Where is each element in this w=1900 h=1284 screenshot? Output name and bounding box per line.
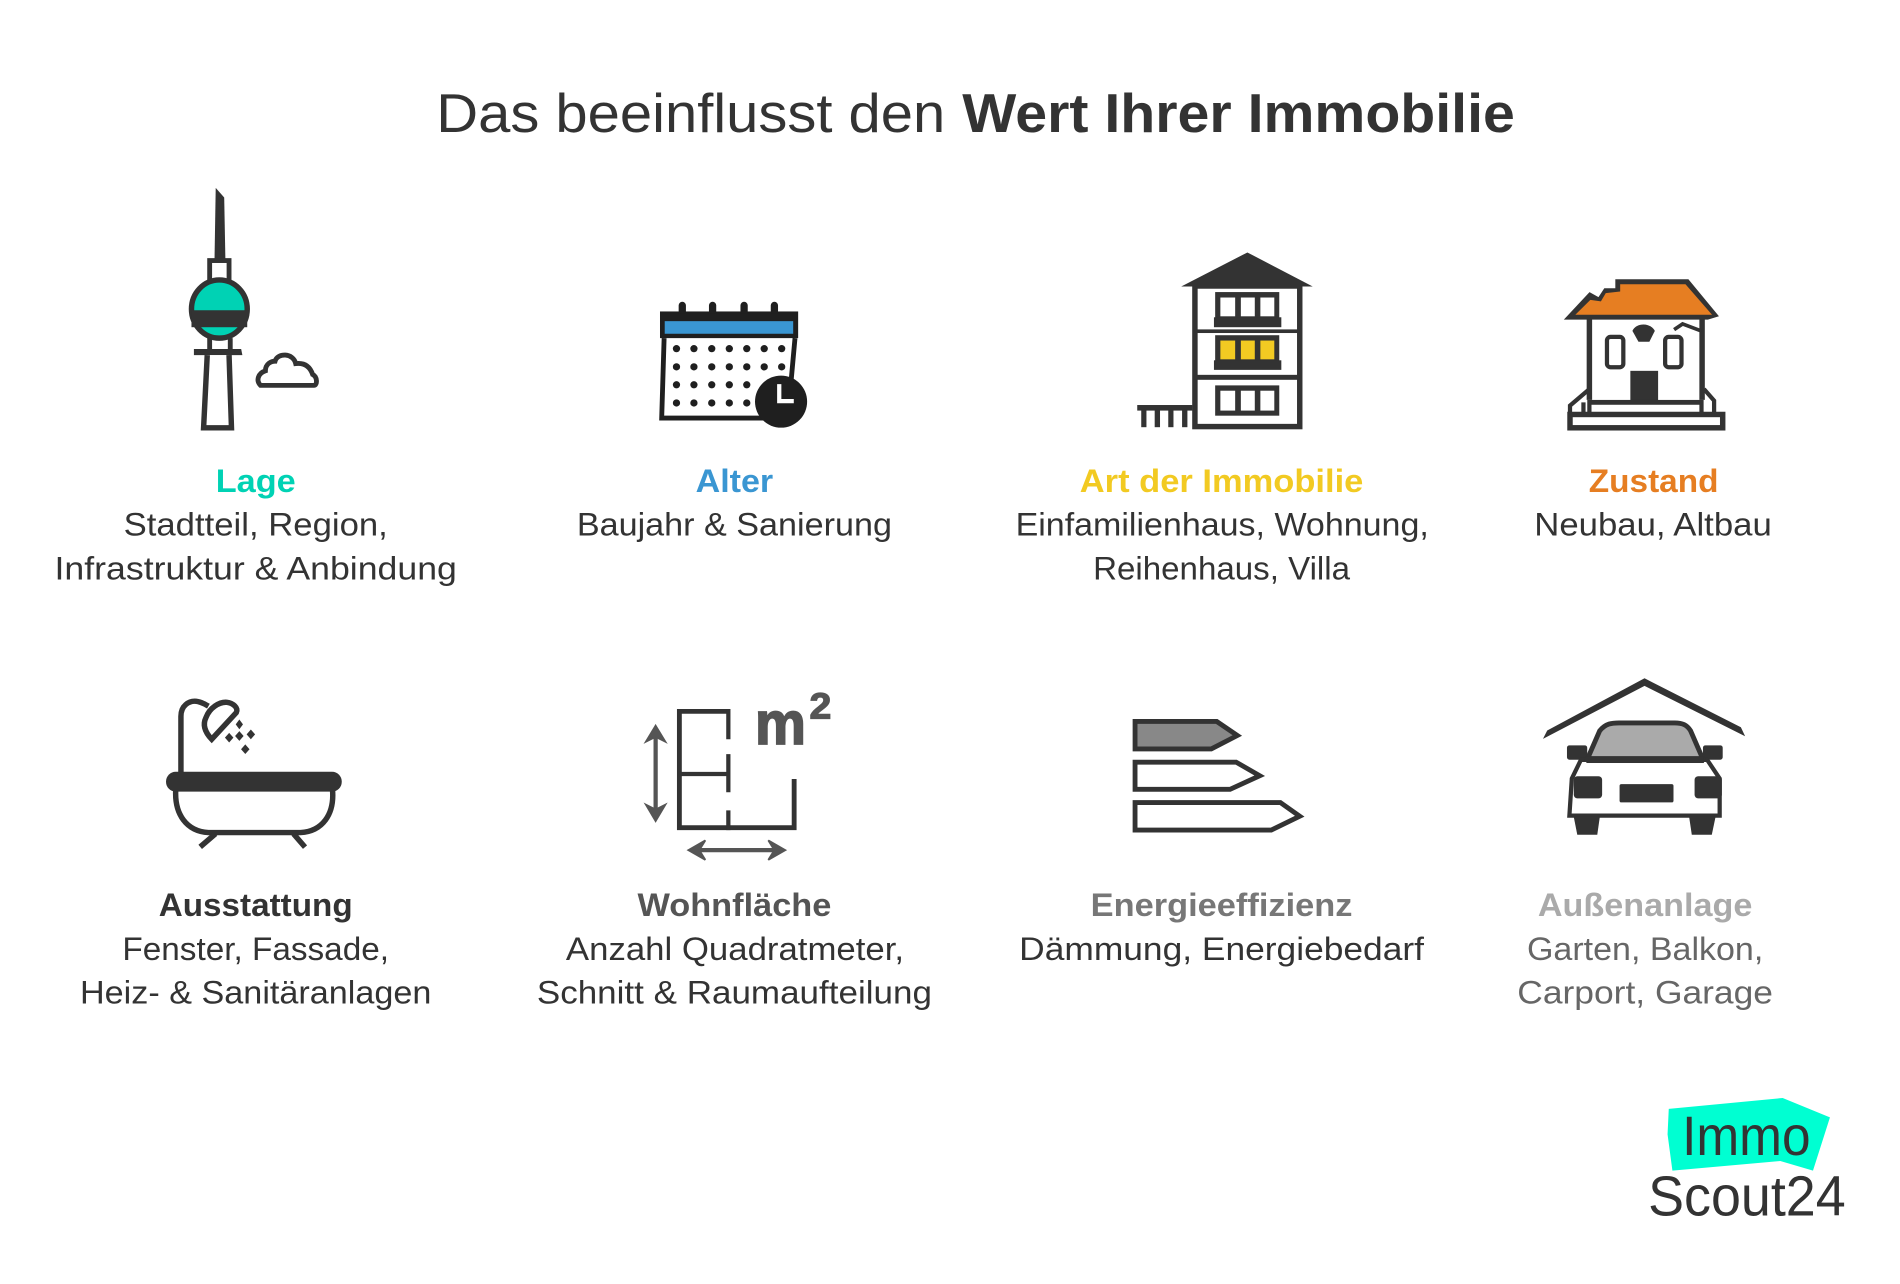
description: Ausstattung: Heiz- & Sanitäranlagen — [80, 973, 431, 1010]
description: Außenanlage: Carport, Garage — [1517, 973, 1773, 1010]
logo: ImmoScout24: Immo — [1682, 1105, 1811, 1167]
description: Wohnfläche — [537, 930, 932, 1010]
heading: Außenanlage: Außenanlage — [1538, 886, 1752, 923]
icon: old house — [1564, 279, 1723, 428]
panel: Energieeffizienz — [1019, 721, 1425, 967]
heading: Ausstattung: Ausstattung — [159, 886, 353, 923]
panel: Alter — [577, 302, 892, 543]
panel: Lage — [55, 188, 457, 586]
description: Ausstattung: Fenster, Fassade, — [122, 930, 389, 967]
description: Lage — [55, 506, 457, 586]
heading: Alter: Alter — [696, 462, 773, 499]
icon: floor plan with m2 — [646, 686, 831, 860]
logo: ImmoScout24: Scout24 — [1648, 1165, 1846, 1229]
description: Zustand: Neubau, Altbau — [1534, 506, 1772, 543]
logo: ImmoScout24 — [1648, 1098, 1846, 1229]
description: Außenanlage: Garten, Balkon, — [1527, 930, 1763, 967]
heading: Energieeffizienz: Energieeffizienz — [1091, 886, 1352, 923]
panel: Ausstattung — [80, 701, 431, 1010]
icon: bathtub with shower — [166, 701, 342, 847]
icon: apartment building — [1137, 252, 1313, 427]
title: Das beeinflusst den — [436, 82, 945, 144]
icon: car under carport — [1543, 678, 1745, 835]
description: Energieeffizienz: Dämmung, Energiebedarf — [1019, 930, 1425, 967]
arrow: horizontal dimension — [688, 840, 785, 860]
heading: Lage: Lage — [216, 462, 296, 499]
panel: Art der Immobilie — [1016, 252, 1429, 586]
description: Ausstattung — [80, 930, 431, 1010]
title: Wert Ihrer Immobilie — [962, 82, 1515, 144]
label: m²: m — [755, 689, 806, 757]
description: Außenanlage — [1517, 930, 1773, 1010]
icon: energy class arrows — [1135, 721, 1300, 830]
icon: Fernsehturm and cloud — [191, 188, 316, 428]
panel: Außenanlage — [1517, 678, 1773, 1010]
heading: Wohnfläche: Wohnfläche — [637, 886, 831, 923]
description: Art der Immobilie: Reihenhaus, Villa — [1093, 549, 1351, 586]
title — [436, 82, 1515, 144]
panel: Wohnfläche — [537, 686, 932, 1010]
panel: Zustand — [1534, 279, 1772, 543]
description: Art der Immobilie — [1016, 506, 1429, 586]
description: Alter: Baujahr & Sanierung — [577, 506, 892, 543]
heading: Zustand: Zustand — [1589, 462, 1718, 499]
description: Lage: Infrastruktur & Anbindung — [55, 549, 457, 586]
icon: calendar with clock — [660, 302, 807, 428]
heading: Art der Immobilie: Art der Immobilie — [1080, 462, 1363, 499]
description: Lage: Stadtteil, Region, — [124, 506, 388, 543]
description: Wohnfläche: Anzahl Quadratmeter, — [566, 930, 904, 967]
arrow: vertical dimension — [646, 726, 665, 821]
description: Wohnfläche: Schnitt & Raumaufteilung — [537, 973, 932, 1010]
description: Art der Immobilie: Einfamilienhaus, Wohnung, — [1016, 506, 1429, 543]
icon: floor plan with m2: 2 — [810, 686, 831, 727]
